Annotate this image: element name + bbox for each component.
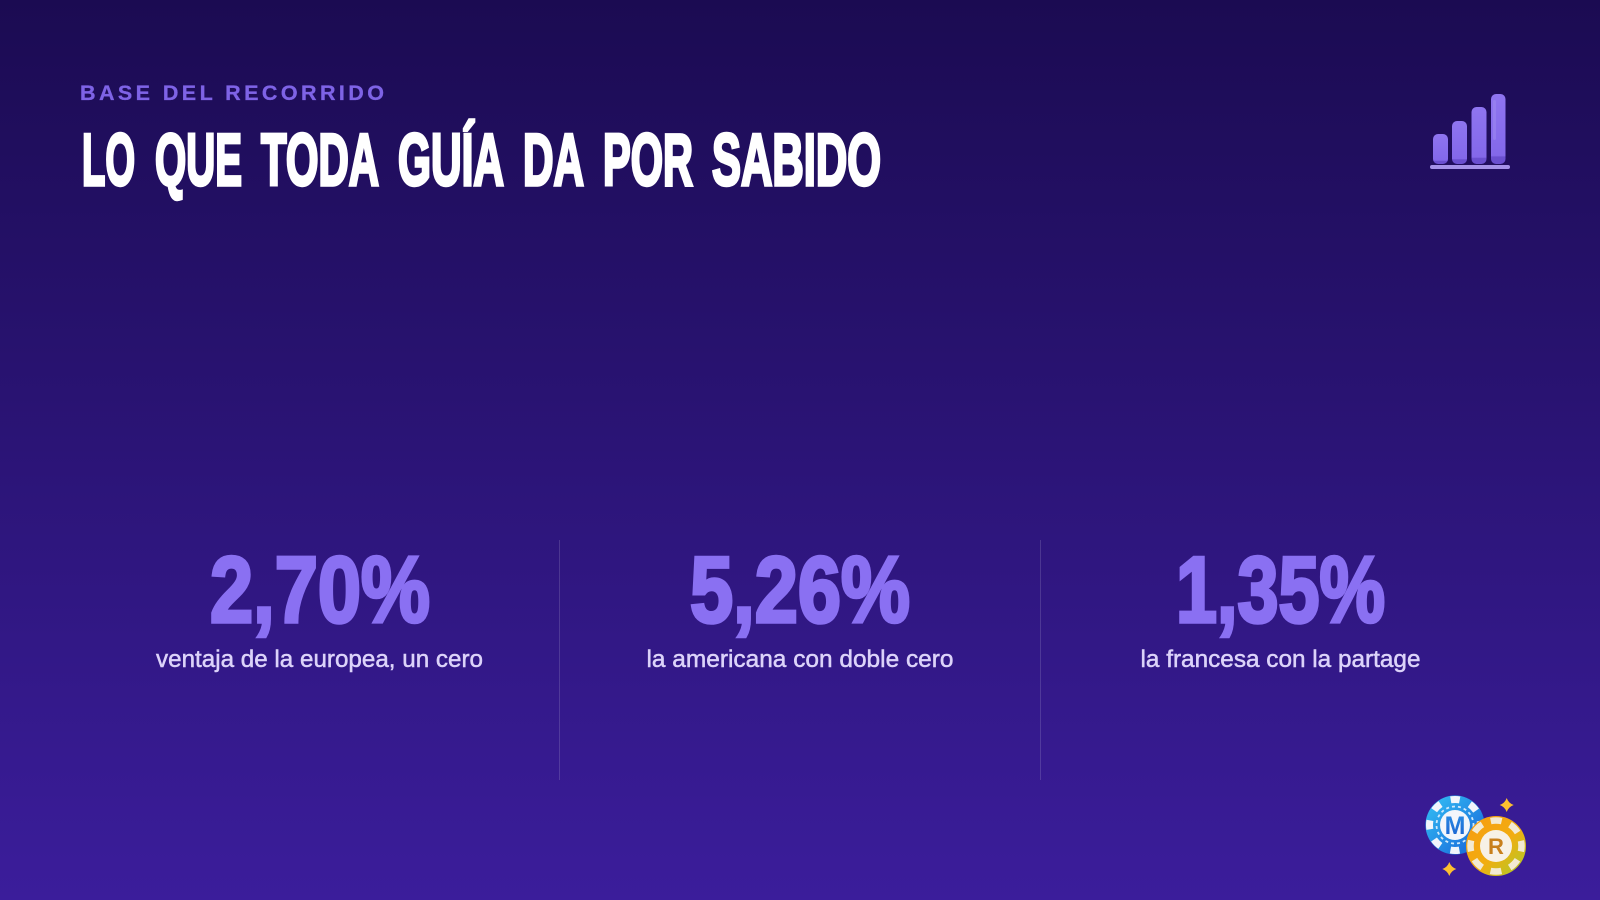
stat value 2,70%: 2,70% — [210, 537, 430, 642]
title: POR — [603, 120, 693, 201]
stat value 1,35%: 1,35% — [1176, 537, 1385, 642]
stat: americana — [646, 537, 954, 673]
chip R: R — [1488, 834, 1504, 859]
chip M: M — [1445, 812, 1465, 840]
icon: bar chart — [1430, 94, 1510, 169]
stat caption europea: ventaja de la europea, un cero — [156, 646, 483, 673]
title: DA — [523, 120, 584, 201]
stat caption francesa: la francesa con la partage — [1140, 646, 1420, 673]
eyebrow heading: BASE DEL RECORRIDO — [80, 81, 384, 105]
title: TODA — [261, 120, 379, 201]
logo: casino chips — [1426, 796, 1526, 876]
sparkle — [1442, 862, 1456, 876]
title: LO — [82, 120, 135, 201]
stat caption americana: la americana con doble cero — [646, 646, 954, 673]
stat: europea — [156, 537, 483, 673]
stat value 5,26%: 5,26% — [690, 537, 910, 642]
sparkle — [1500, 798, 1514, 812]
stat: francesa — [1140, 537, 1420, 673]
title: QUE — [155, 120, 242, 201]
title: GUÍA — [398, 120, 504, 201]
title: SABIDO — [712, 120, 881, 201]
title — [82, 120, 881, 201]
